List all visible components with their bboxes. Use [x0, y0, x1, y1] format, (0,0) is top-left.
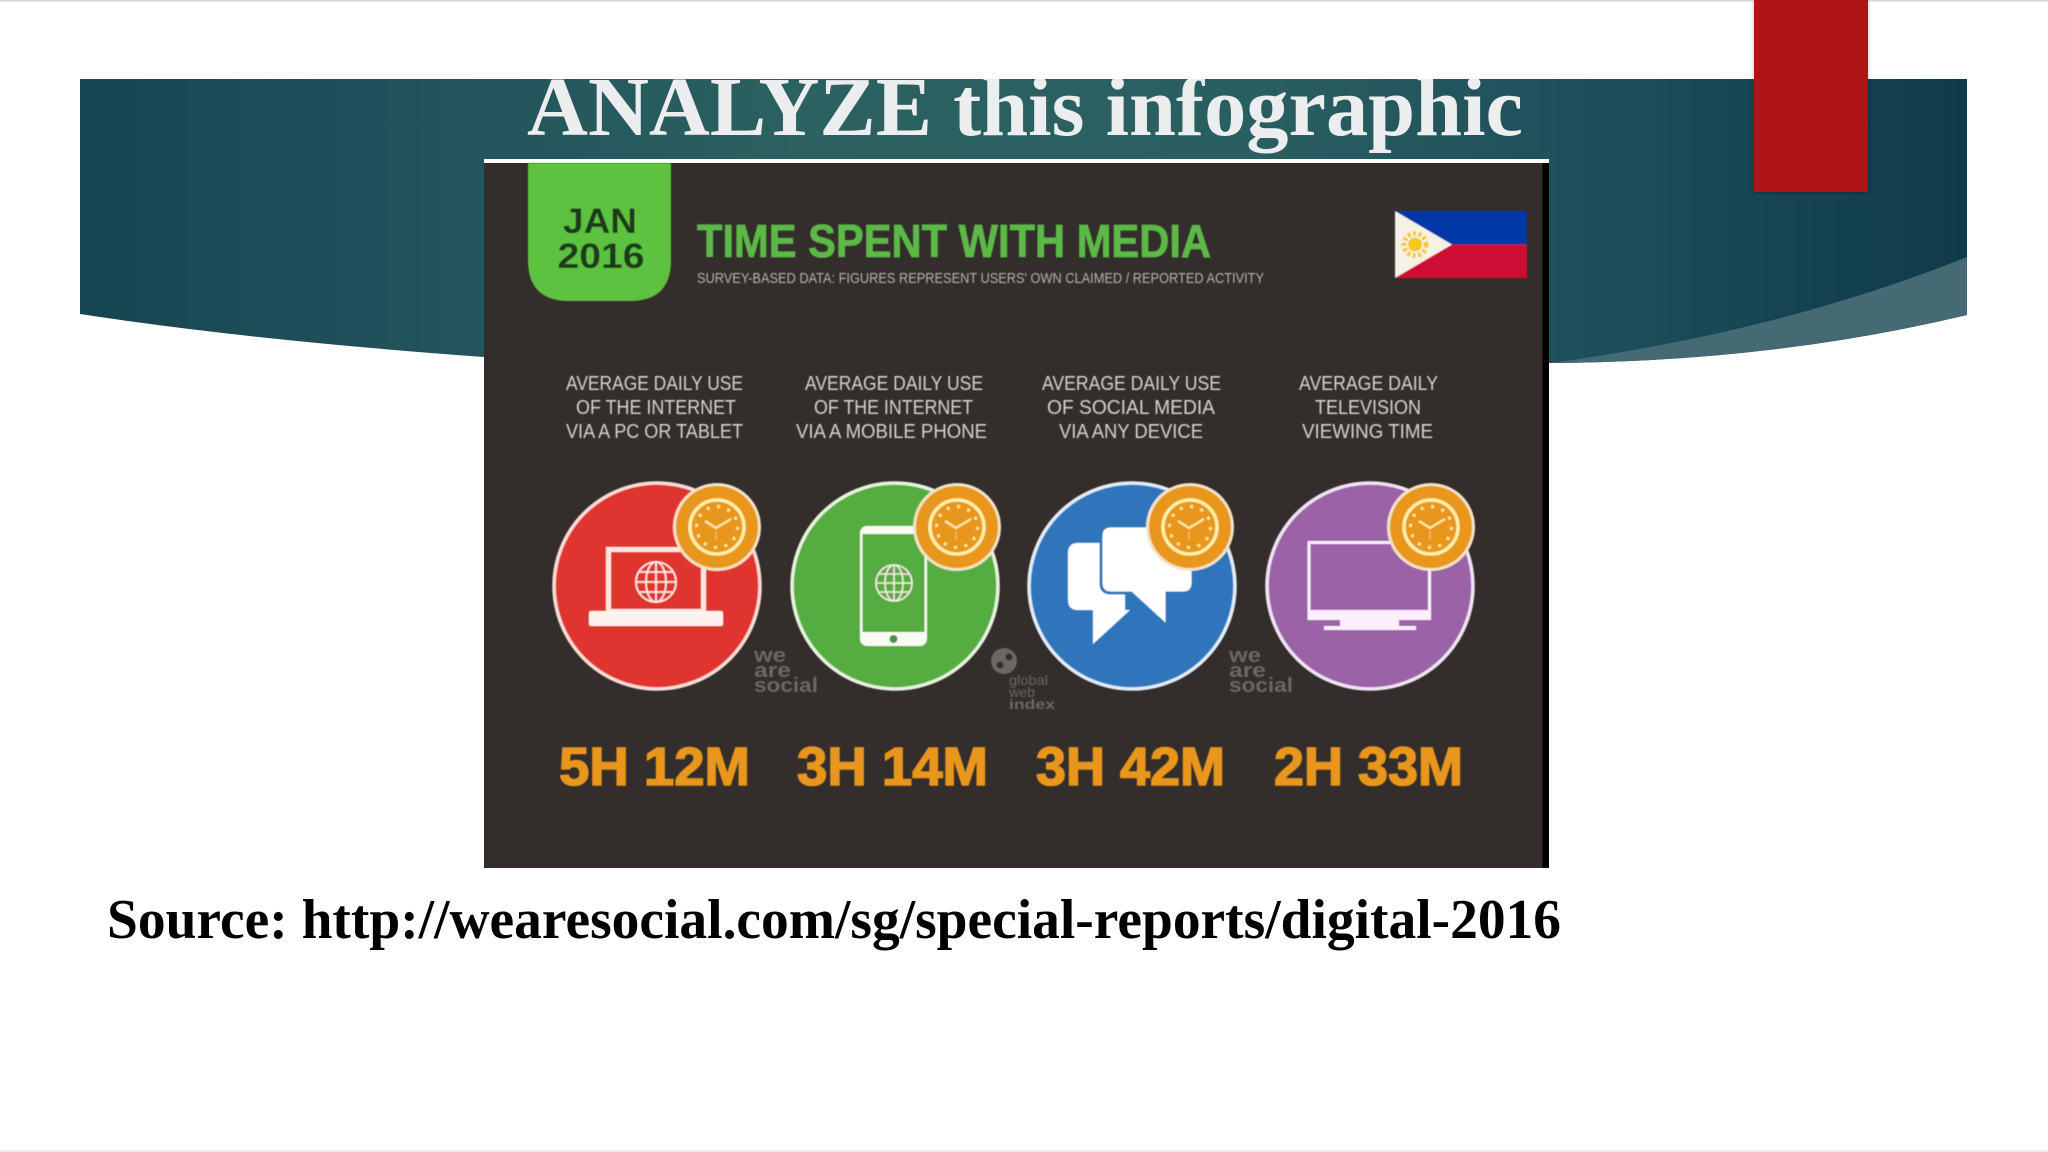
logo: we are social second: are: [1229, 660, 1266, 682]
title: ANALYZE this infographic: [527, 61, 1523, 154]
logo: we are social: we: [753, 645, 786, 667]
icon: Philippine flag: [1395, 211, 1527, 278]
column labels: internet via mobile: [796, 373, 987, 443]
icon: phone circle: [792, 483, 1001, 689]
value: mobile time: 3H 14M: [797, 737, 988, 797]
logo: we are social second: social: [1229, 675, 1293, 697]
icon: chat bubbles circle: [1029, 483, 1235, 689]
column labels: internet via PC: VIA A PC OR TABLET: [566, 421, 743, 443]
logo: we are social second: we: [1228, 645, 1261, 667]
date tab: JAN: [563, 202, 637, 241]
banner light wave: [1550, 257, 1967, 363]
logo: we are social: social: [754, 675, 818, 697]
value: PC time: 5H 12M: [559, 737, 750, 797]
column labels: internet via mobile: AVERAGE DAILY USE: [805, 373, 983, 395]
column labels: social media: AVERAGE DAILY USE: [1042, 373, 1221, 395]
icon: television circle: [1267, 483, 1475, 689]
column labels: television: TELEVISION: [1315, 397, 1421, 419]
red ribbon: [1754, 0, 1868, 192]
column labels: television: VIEWING TIME: [1302, 421, 1433, 443]
logo: we are social: are: [754, 660, 791, 682]
logo: global web index: global: [1009, 672, 1048, 688]
column labels: television: AVERAGE DAILY: [1299, 373, 1438, 395]
infographic image panel: [484, 159, 1549, 868]
value: TV time: 2H 33M: [1274, 737, 1463, 797]
heading: TIME SPENT WITH MEDIA: [697, 215, 1211, 267]
column labels: internet via PC: [566, 373, 743, 443]
column labels: internet via PC: OF THE INTERNET: [576, 397, 736, 419]
column labels: television: [1299, 373, 1438, 443]
value: social time: 3H 42M: [1036, 737, 1225, 797]
subheading: SURVEY-BASED DATA: FIGURES REPRESENT USERS' OWN CLAIMED / REPORTED ACTIVITY: [697, 270, 1264, 287]
column labels: internet via PC: AVERAGE DAILY USE: [566, 373, 743, 395]
banner: [80, 79, 1967, 370]
logo: we are social second: [1228, 645, 1293, 697]
column labels: social media: [1042, 373, 1221, 443]
column labels: internet via mobile: OF THE INTERNET: [814, 397, 973, 419]
column labels: social media: VIA ANY DEVICE: [1059, 421, 1203, 443]
date tab: 2016: [558, 237, 644, 276]
column labels: social media: OF SOCIAL MEDIA: [1047, 397, 1216, 419]
source line: Source: http://wearesocial.com/sg/special-reports/digital-2016: [107, 889, 1561, 951]
column labels: internet via mobile: VIA A MOBILE PHONE: [796, 421, 987, 443]
icon: laptop circle: [554, 483, 761, 689]
logo: global web index: [991, 648, 1055, 712]
logo: global web index: web: [1008, 684, 1035, 700]
logo: we are social: [753, 645, 818, 697]
date tab: [528, 163, 671, 301]
logo: global web index: index: [1009, 696, 1055, 712]
